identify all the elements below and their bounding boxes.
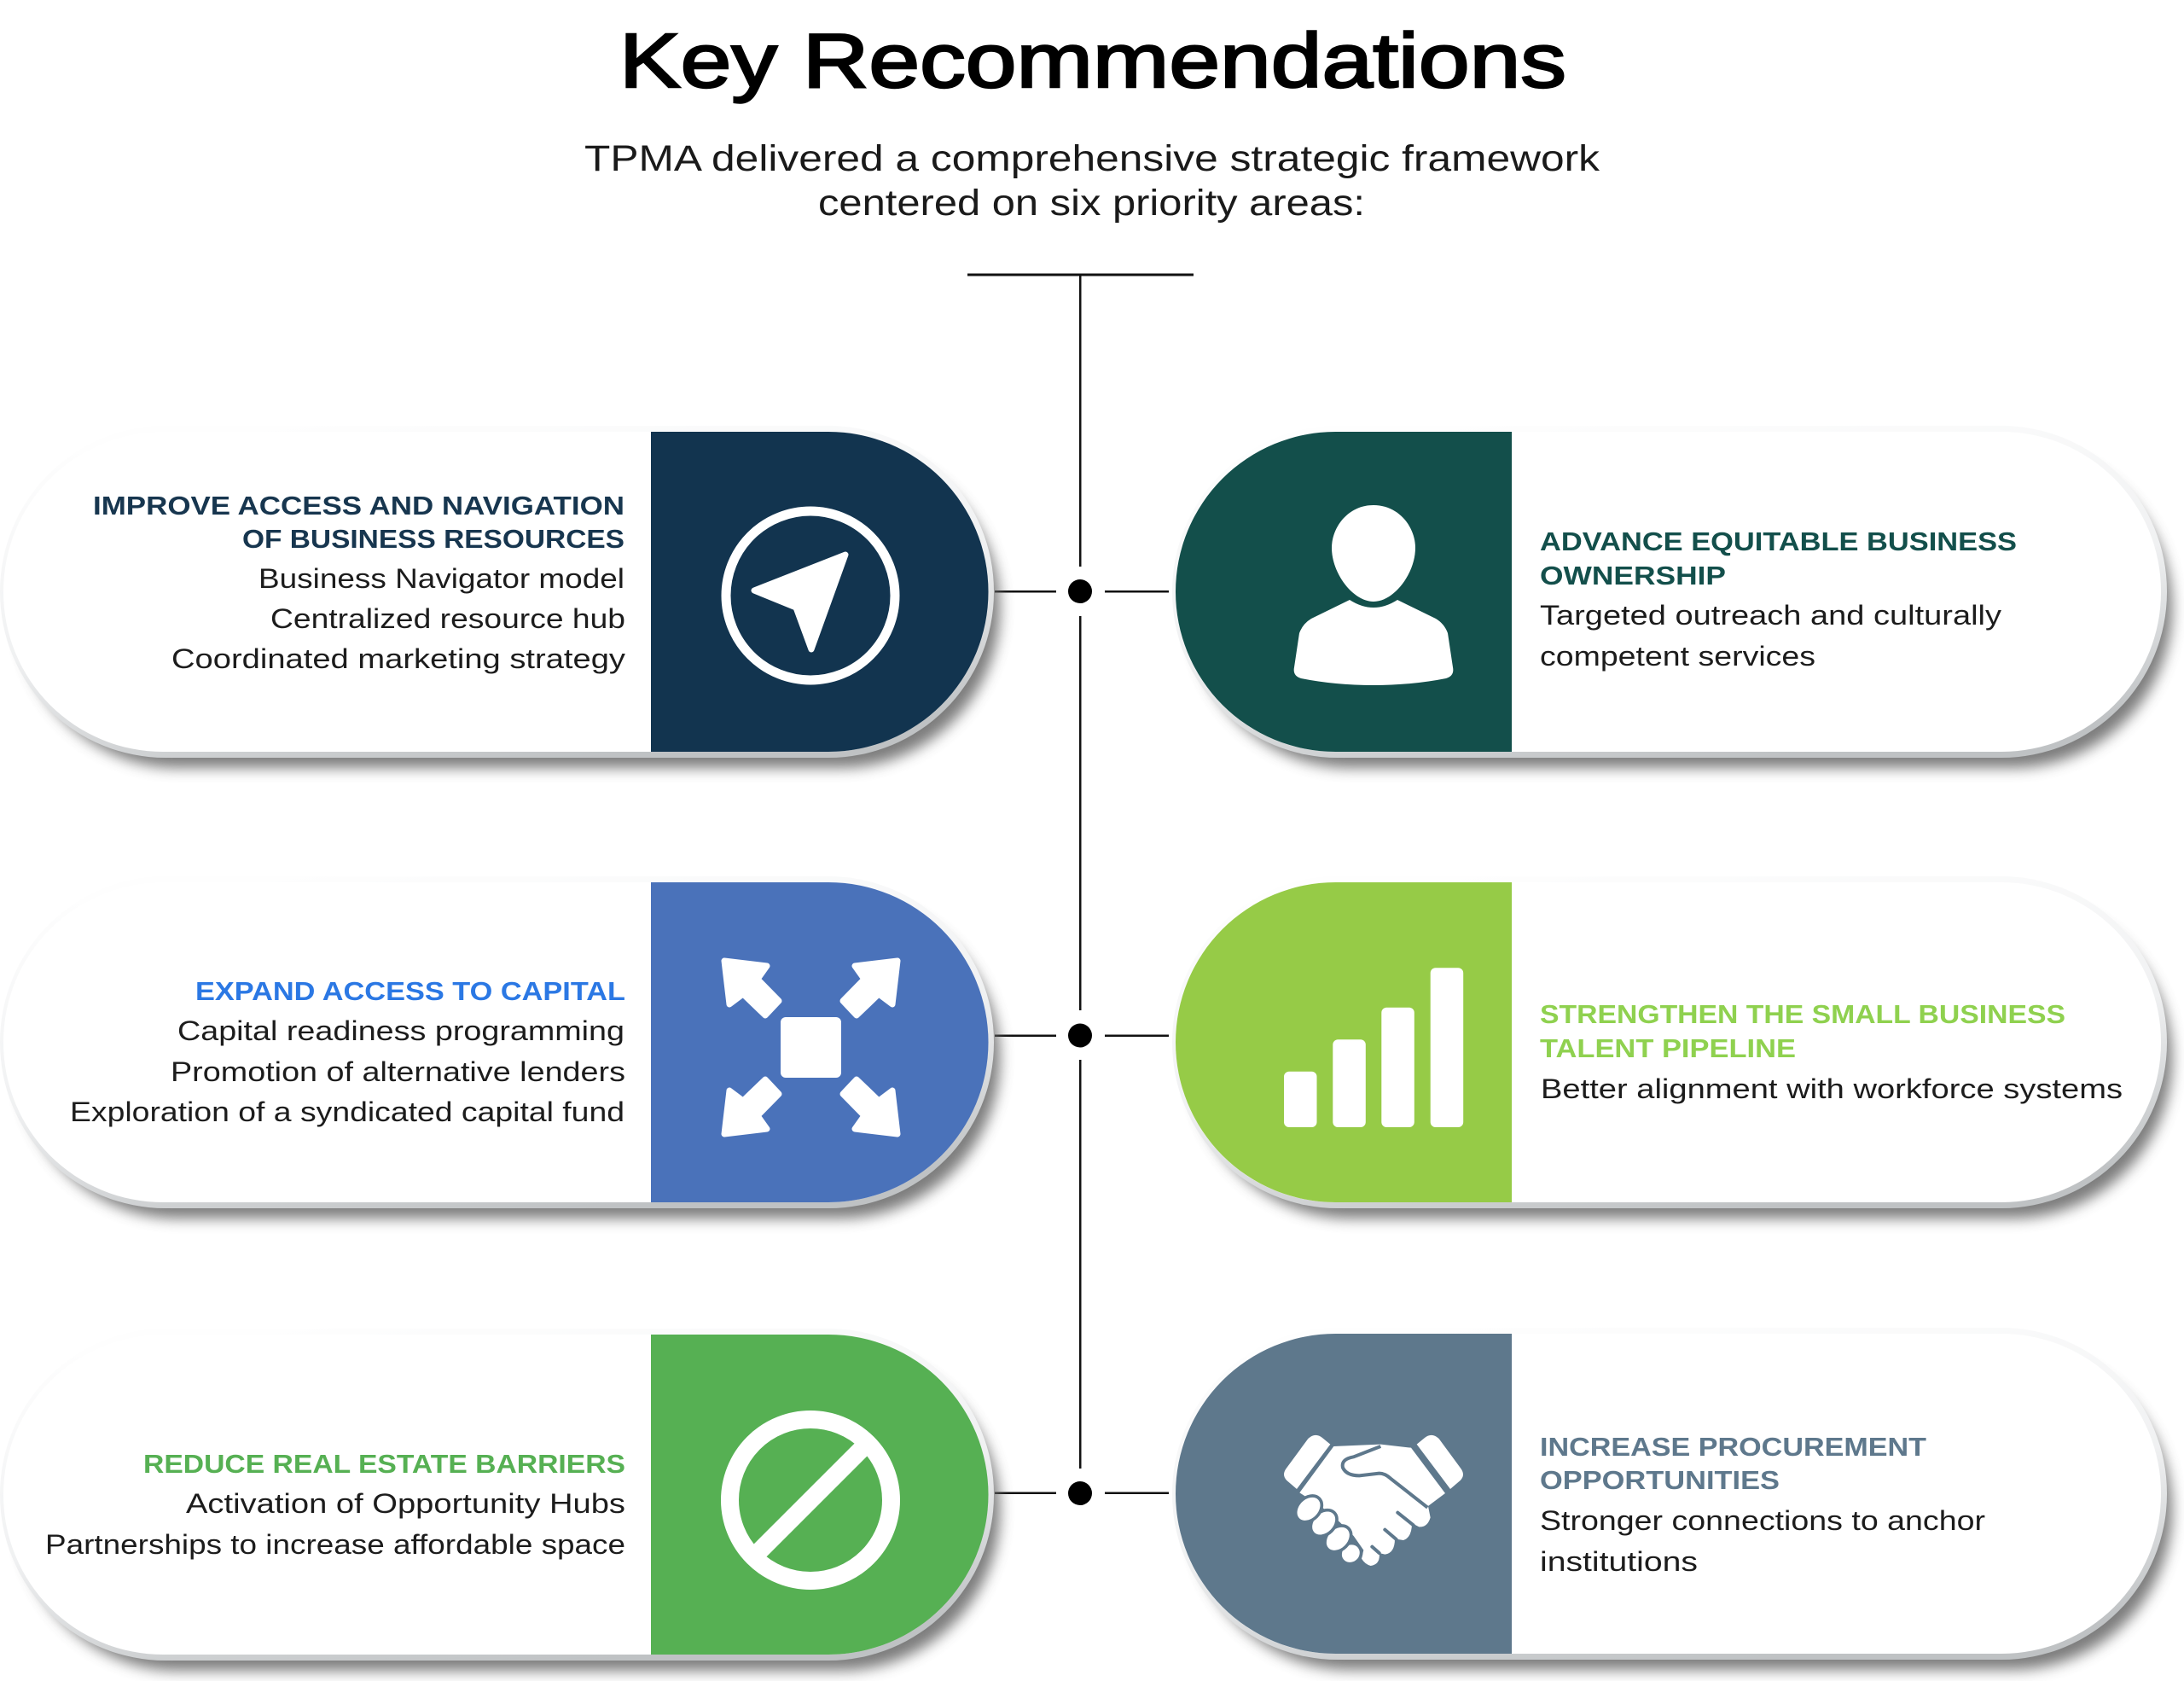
panel: increase procurement opportunities [1172, 1328, 2172, 1670]
body text: Business Navigator model [258, 563, 624, 594]
colour block: navy [651, 432, 988, 752]
colour block: dark teal [1176, 432, 1512, 752]
body text: Better alignment with workforce systems [1541, 1073, 2123, 1104]
colour block: slate [1176, 1334, 1512, 1654]
heading: OWNERSHIP [1540, 561, 1726, 590]
colour block: blue [651, 882, 988, 1202]
heading [93, 491, 624, 554]
heading: EXPAND ACCESS TO CAPITAL [195, 976, 625, 1006]
heading: INCREASE PROCUREMENT [1540, 1432, 1926, 1462]
body text: Activation of Opportunity Hubs [186, 1488, 625, 1519]
heading [1540, 999, 2065, 1063]
body text: Coordinated marketing strategy [171, 643, 625, 674]
connector: row 1 [995, 579, 1169, 603]
body text [45, 1488, 625, 1560]
icon: handshake [1284, 1435, 1463, 1568]
panel: expand access to capital [0, 876, 1000, 1219]
body text: Exploration of a syndicated capital fund [70, 1096, 624, 1127]
body text: institutions [1540, 1546, 1698, 1577]
icon: expand arrows [724, 961, 897, 1134]
timeline spine [967, 273, 1194, 1469]
subtitle: centered on six priority areas: [818, 183, 1365, 224]
connector: row 3 [995, 1481, 1169, 1505]
panel: improve access and navigation [0, 426, 1000, 768]
heading: ADVANCE EQUITABLE BUSINESS [1540, 526, 2017, 556]
icon: prohibited sign [730, 1420, 891, 1580]
panel: advance equitable business ownership [1172, 426, 2172, 768]
heading: REDUCE REAL ESTATE BARRIERS [143, 1449, 625, 1479]
title: Key Recommendations [619, 19, 1566, 104]
body text: Capital readiness programming [177, 1015, 624, 1046]
colour block: lime [1176, 882, 1512, 1202]
heading: OF BUSINESS RESOURCES [242, 524, 624, 554]
body text [171, 563, 625, 674]
body text [1540, 1505, 1985, 1577]
body text [70, 1015, 625, 1127]
heading: OPPORTUNITIES [1540, 1465, 1780, 1495]
body text: Centralized resource hub [270, 603, 625, 634]
heading [1540, 1432, 1926, 1495]
panel: reduce real estate barriers [0, 1329, 1000, 1671]
icon: navigation compass [726, 511, 895, 680]
body text: competent services [1540, 641, 1815, 672]
subtitle [584, 138, 1600, 224]
body text: Stronger connections to anchor [1540, 1505, 1985, 1536]
panel: strengthen talent pipeline [1172, 876, 2172, 1219]
connector: row 2 [995, 1024, 1169, 1048]
body text: Targeted outreach and culturally [1540, 600, 2001, 631]
body text: Promotion of alternative lenders [171, 1056, 625, 1087]
colour block: green [651, 1335, 988, 1655]
heading: STRENGTHEN THE SMALL BUSINESS [1540, 999, 2065, 1029]
heading [1540, 526, 2017, 590]
icon: person [1294, 505, 1453, 685]
heading: TALENT PIPELINE [1540, 1033, 1796, 1063]
icon: bar chart [1284, 968, 1463, 1127]
subtitle: TPMA delivered a comprehensive strategic framework [584, 138, 1600, 179]
heading: IMPROVE ACCESS AND NAVIGATION [93, 491, 624, 521]
body text [1540, 600, 2001, 672]
body text: Partnerships to increase affordable space [45, 1529, 625, 1560]
